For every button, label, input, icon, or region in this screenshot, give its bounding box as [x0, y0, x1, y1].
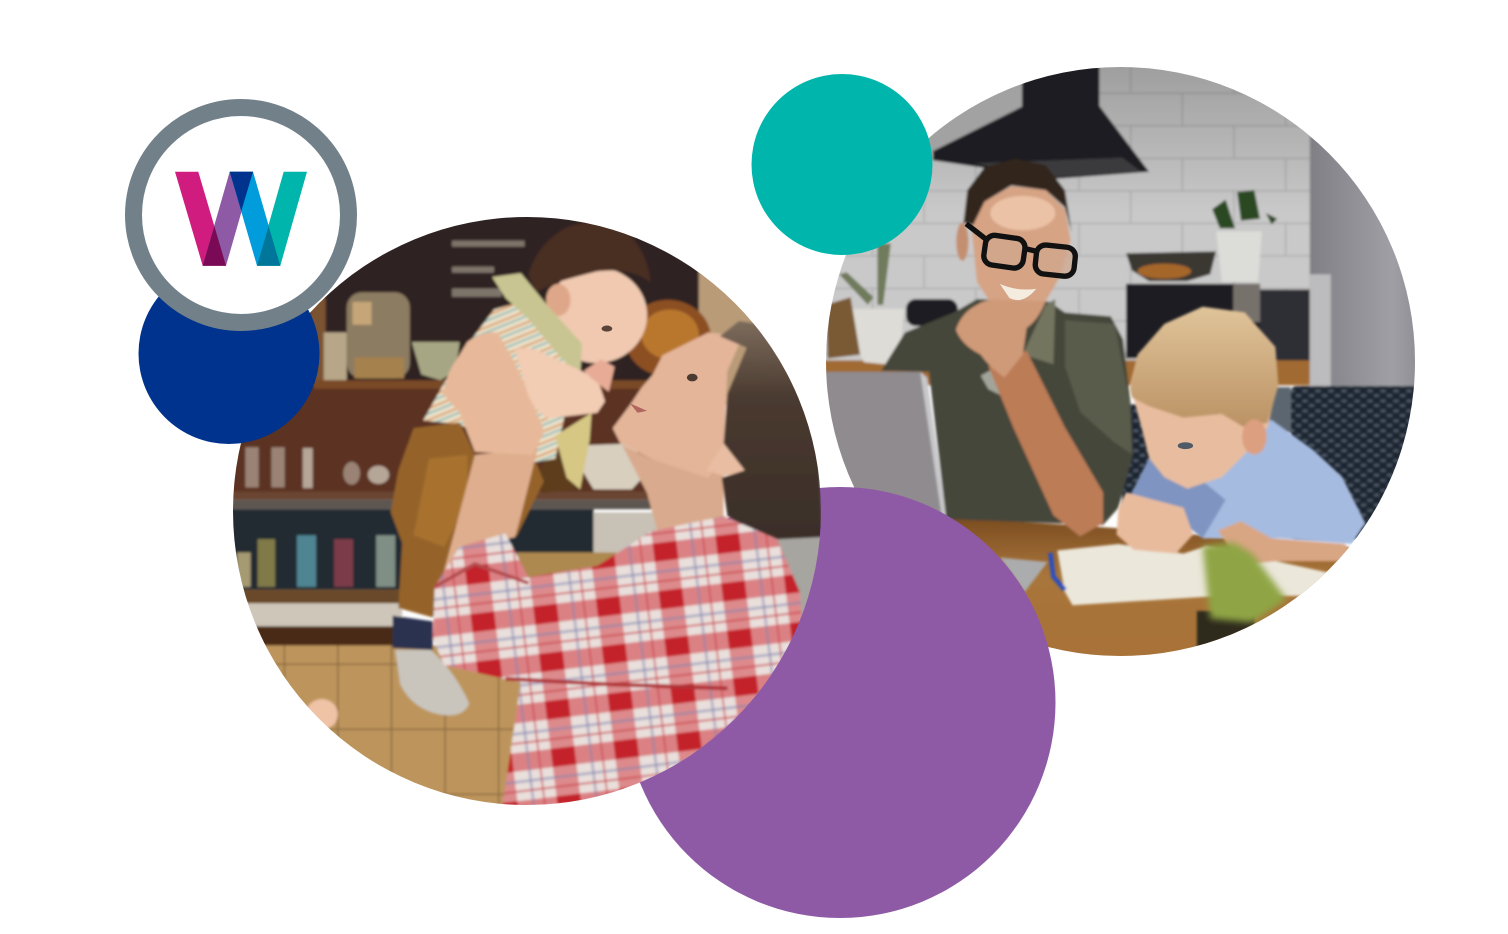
- upper left wall shadow: [928, 104, 1020, 152]
- plant foliage: [1203, 542, 1287, 622]
- blue ribbon: [1050, 553, 1065, 590]
- chalk line 1: [452, 241, 525, 247]
- blue stroke: [230, 172, 280, 266]
- left lens: [983, 234, 1026, 269]
- pink stroke: [175, 172, 226, 266]
- fridge: [1310, 117, 1420, 393]
- bottle 3: [297, 535, 316, 587]
- glass 4: [343, 462, 360, 485]
- kettle: [906, 299, 958, 326]
- parent neck: [622, 445, 724, 535]
- parent lips: [630, 403, 647, 413]
- baby eye: [602, 326, 612, 332]
- baby sock: [395, 650, 469, 715]
- right lens: [1034, 244, 1076, 277]
- appliance right of microwave: [1260, 290, 1310, 362]
- jar highlight: [352, 302, 372, 325]
- ear: [956, 223, 968, 261]
- navy overlap: [230, 172, 253, 211]
- wall shading: [930, 67, 1310, 186]
- chalk writing: [452, 241, 525, 297]
- baby arm: [515, 348, 605, 419]
- basket: [517, 552, 616, 587]
- sink area: [230, 603, 402, 627]
- laptop edge: [920, 372, 946, 515]
- baby hair: [528, 223, 651, 292]
- darker shirt front: [1130, 458, 1226, 538]
- jar: [347, 292, 410, 378]
- basket on counter: [826, 297, 860, 358]
- beige wall: [699, 267, 830, 405]
- woman hair: [963, 159, 1072, 232]
- glass 2: [271, 447, 285, 487]
- parent arm: [444, 447, 538, 574]
- forehead highlight: [990, 196, 1055, 230]
- table: [951, 517, 1350, 656]
- child left arm: [1117, 492, 1193, 554]
- jars left: [324, 332, 347, 380]
- purple stroke: [203, 172, 253, 266]
- sleeve fold: [435, 564, 528, 587]
- sleeve lower edge: [506, 679, 727, 688]
- dark chalkboard: [230, 210, 703, 382]
- woman face: [971, 186, 1071, 314]
- parent hand: [442, 332, 545, 455]
- notebook: [1057, 544, 1329, 605]
- teal stroke: [257, 172, 307, 266]
- fruit: [1138, 264, 1191, 279]
- W logo: [175, 172, 307, 266]
- glasses: [966, 224, 1076, 277]
- shelf shadow: [230, 500, 662, 509]
- laptop lid: [826, 370, 947, 516]
- child shirt: [1130, 420, 1365, 544]
- teal circle: [752, 74, 932, 255]
- maroon overlap: [203, 226, 226, 266]
- bottle 4: [334, 539, 353, 587]
- parent hair: [720, 321, 822, 540]
- baby shirt: [423, 302, 574, 463]
- chalk line 2: [452, 267, 494, 273]
- background right of hair: [766, 535, 830, 623]
- undershirt: [980, 369, 1001, 396]
- baby ear: [546, 284, 571, 316]
- middle shelf: [230, 491, 662, 500]
- wood plank: [310, 298, 326, 386]
- tiles: [230, 645, 536, 810]
- gray cabinet: [1268, 387, 1291, 433]
- bottle 5: [376, 535, 395, 587]
- left plant leaves: [839, 244, 891, 305]
- parent ear: [706, 443, 745, 476]
- jar contents: [354, 357, 404, 378]
- finger: [306, 699, 338, 730]
- parent eye: [687, 374, 698, 381]
- top shelf: [314, 380, 659, 389]
- baby pants highlight: [414, 455, 467, 547]
- ring: [134, 108, 348, 322]
- cooker hood: [933, 64, 1149, 179]
- fruit bowl: [1126, 251, 1216, 281]
- woman shirt: [881, 299, 1133, 525]
- navy circle: [138, 263, 320, 444]
- lower shelf: [230, 590, 402, 603]
- bridge: [1024, 248, 1037, 251]
- parent face: [613, 332, 743, 478]
- forearm: [988, 351, 1103, 536]
- table plant pot: [1197, 611, 1254, 649]
- behind bib: [540, 440, 574, 493]
- woman hand: [956, 299, 1046, 378]
- temple: [966, 224, 987, 240]
- table plant: [1203, 542, 1287, 622]
- child head: [1130, 307, 1277, 489]
- child hair: [1130, 307, 1278, 427]
- photo: woman with laptop and child in kitchen: [820, 60, 1420, 660]
- glass 1: [245, 447, 259, 487]
- shirt collar: [1023, 299, 1055, 364]
- dark teal overlap: [257, 226, 280, 266]
- baby collar: [492, 273, 582, 378]
- chair: [1291, 386, 1420, 539]
- small laptop base: [1000, 557, 1048, 592]
- brown wall: [230, 386, 662, 495]
- glassware on middle shelf: [245, 447, 389, 488]
- bottle 1: [237, 552, 251, 587]
- baby cuff: [393, 616, 433, 650]
- baby hand: [584, 359, 615, 392]
- logo badge: [134, 108, 348, 322]
- white box: [594, 512, 659, 554]
- shirt sleeve highlight: [1065, 320, 1132, 454]
- chalk line 3: [452, 288, 502, 297]
- green bowl: [412, 342, 460, 380]
- chair behind child: [1120, 402, 1151, 504]
- wooden plate: [625, 300, 711, 376]
- purple circle: [624, 487, 1056, 918]
- photo: parent lifting baby in cafe: [230, 210, 830, 810]
- smile: [1000, 284, 1036, 300]
- hood underside: [973, 158, 1141, 177]
- dark bottle board: [230, 509, 594, 590]
- microwave: [1126, 284, 1260, 358]
- white plant pot: [1216, 231, 1262, 282]
- left plant and pot: [849, 309, 904, 364]
- parent shirt: [433, 516, 802, 810]
- bottles: [237, 535, 395, 587]
- plate centre: [641, 309, 699, 359]
- silver bar: [1310, 274, 1331, 389]
- glass 3: [303, 448, 313, 488]
- kitchen wall: [820, 60, 1314, 378]
- counter edge: [230, 626, 402, 646]
- green plant: [1212, 190, 1277, 228]
- child eye: [1178, 442, 1193, 449]
- bib: [555, 413, 592, 489]
- glass 5: [368, 466, 389, 484]
- white dish: [582, 443, 642, 489]
- baby head: [546, 267, 647, 363]
- bottle 2: [258, 539, 275, 587]
- counter: [820, 360, 1310, 385]
- child ear: [1242, 419, 1267, 455]
- microwave handle side: [1233, 284, 1260, 322]
- baby pants: [391, 422, 544, 618]
- child right arm: [1218, 521, 1350, 565]
